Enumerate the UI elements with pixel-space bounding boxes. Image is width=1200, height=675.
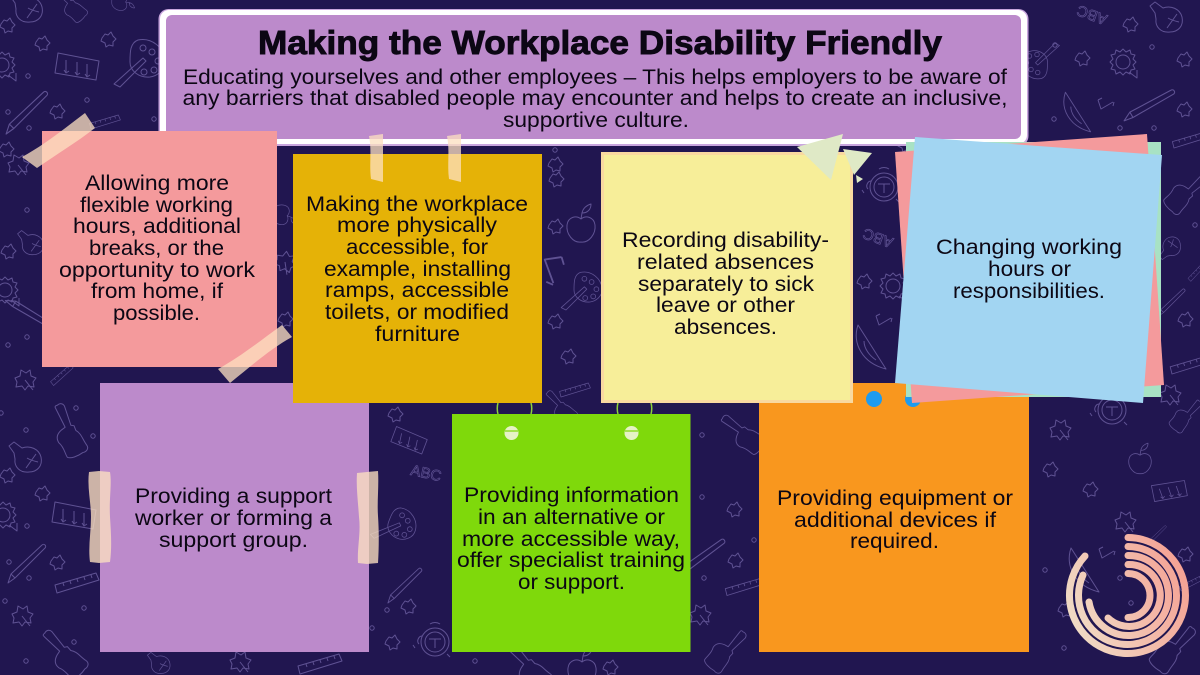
note text	[306, 193, 528, 346]
note text: support group.	[159, 529, 308, 552]
note text: responsibilities.	[953, 280, 1105, 303]
panel: green note information	[452, 403, 690, 652]
note text: Recording disability-	[622, 229, 829, 252]
note text: flexible working	[80, 194, 233, 217]
note text	[59, 172, 256, 325]
note text: from home, if	[91, 280, 223, 303]
note text	[777, 487, 1013, 553]
tape: top left	[22, 113, 95, 168]
note text: Allowing more	[85, 172, 229, 195]
icon: hole punches	[504, 426, 638, 440]
panel: purple note support worker	[88, 383, 379, 652]
icon: pale green triangles	[797, 134, 872, 183]
note text: Providing information	[464, 484, 679, 507]
note text: toilets, or modified	[325, 301, 509, 324]
subtitle text	[182, 66, 1008, 132]
note text: Making the workplace	[306, 193, 528, 216]
note text: additional devices if	[794, 509, 996, 532]
subtitle text: any barriers that disabled people may encounter and helps to create an inclusive,	[182, 87, 1008, 110]
note text: breaks, or the	[89, 237, 224, 260]
background doodle pattern: ABC	[409, 462, 443, 485]
panel: header title box	[158, 9, 1028, 146]
tape: right	[357, 471, 379, 564]
note text: hours, additional	[73, 215, 241, 238]
tape: bottom right	[218, 325, 292, 383]
note text	[936, 236, 1122, 303]
note text: Changing working	[936, 236, 1122, 259]
note text: separately to sick	[638, 273, 815, 296]
subtitle text: supportive culture.	[503, 109, 689, 132]
note text	[622, 229, 829, 339]
note text: hours or	[988, 258, 1071, 281]
note text: offer specialist training	[457, 549, 685, 572]
note text: ramps, accessible	[325, 279, 509, 302]
note text: opportunity to work	[59, 259, 256, 282]
icon: spiral logo	[1069, 538, 1185, 653]
panel: yellow note absences	[602, 134, 872, 402]
note text: or support.	[518, 571, 625, 594]
note text: possible.	[113, 302, 200, 325]
icon: blue pins	[866, 391, 921, 407]
icon: hanging strings	[497, 403, 652, 414]
note text: example, installing	[324, 258, 511, 281]
note text: Providing equipment or	[777, 487, 1013, 510]
note text: Providing a support	[135, 485, 332, 508]
note text	[457, 484, 685, 594]
note text: required.	[850, 530, 939, 553]
tape: right	[447, 134, 461, 182]
background doodle pattern: ABC	[861, 224, 896, 251]
note text	[134, 485, 332, 552]
background doodle pattern: ABC	[1075, 1, 1110, 28]
note text: related absences	[637, 251, 814, 274]
note text: more accessible way,	[462, 528, 680, 551]
note text: furniture	[375, 323, 460, 346]
note text: more physically	[337, 214, 498, 237]
panel: gold note physical access	[293, 134, 542, 403]
title: Making the Workplace Disability Friendly	[258, 24, 943, 61]
panel: pink note flexible hours	[22, 113, 292, 383]
note text: in an alternative or	[478, 506, 665, 529]
note text: accessible, for	[346, 236, 488, 259]
tape: left	[88, 471, 111, 563]
note text: leave or other	[656, 294, 795, 317]
note text: worker or forming a	[134, 507, 332, 530]
note text: absences.	[674, 316, 777, 339]
panel: stacked blue note responsibilities	[895, 134, 1164, 403]
panel: orange note equipment	[759, 383, 1029, 652]
subtitle text: Educating yourselves and other employees – This helps employers to be aware of	[183, 66, 1007, 89]
tape: left	[369, 134, 383, 182]
